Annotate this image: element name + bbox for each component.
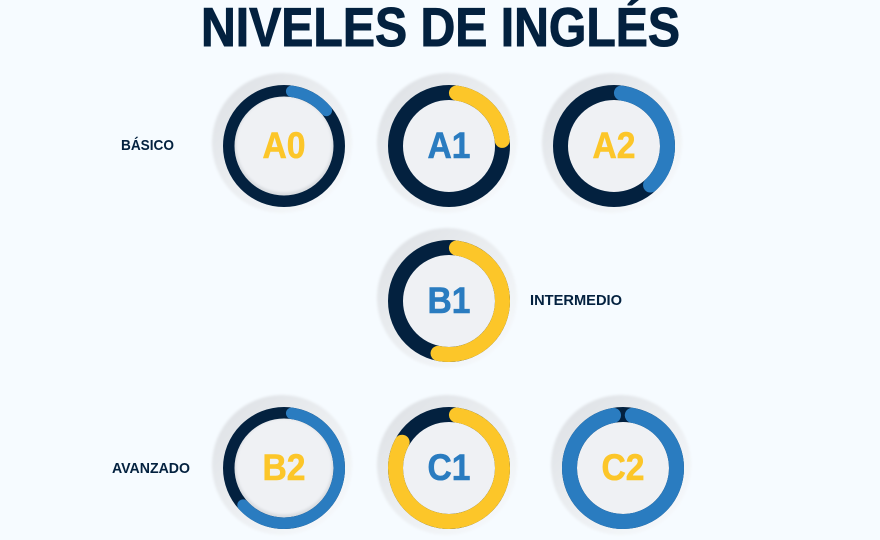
level A2: A2 — [592, 125, 636, 166]
label: avanzado: AVANZADO — [112, 460, 190, 477]
level A2 — [542, 73, 682, 213]
level A1 — [377, 73, 517, 213]
level C1: C1 — [428, 447, 470, 488]
level B2 — [212, 395, 352, 535]
level B2: B2 — [262, 447, 306, 488]
level B1 — [377, 228, 517, 368]
level A1: A1 — [428, 125, 470, 166]
level A0 — [212, 73, 352, 213]
level C2: C2 — [602, 447, 644, 488]
label: básico: BÁSICO — [121, 137, 174, 154]
level C1 — [377, 395, 517, 535]
level A0: A0 — [262, 125, 306, 166]
level C2 — [551, 395, 691, 535]
label: intermedio: INTERMEDIO — [530, 292, 622, 309]
level B1: B1 — [428, 280, 470, 321]
